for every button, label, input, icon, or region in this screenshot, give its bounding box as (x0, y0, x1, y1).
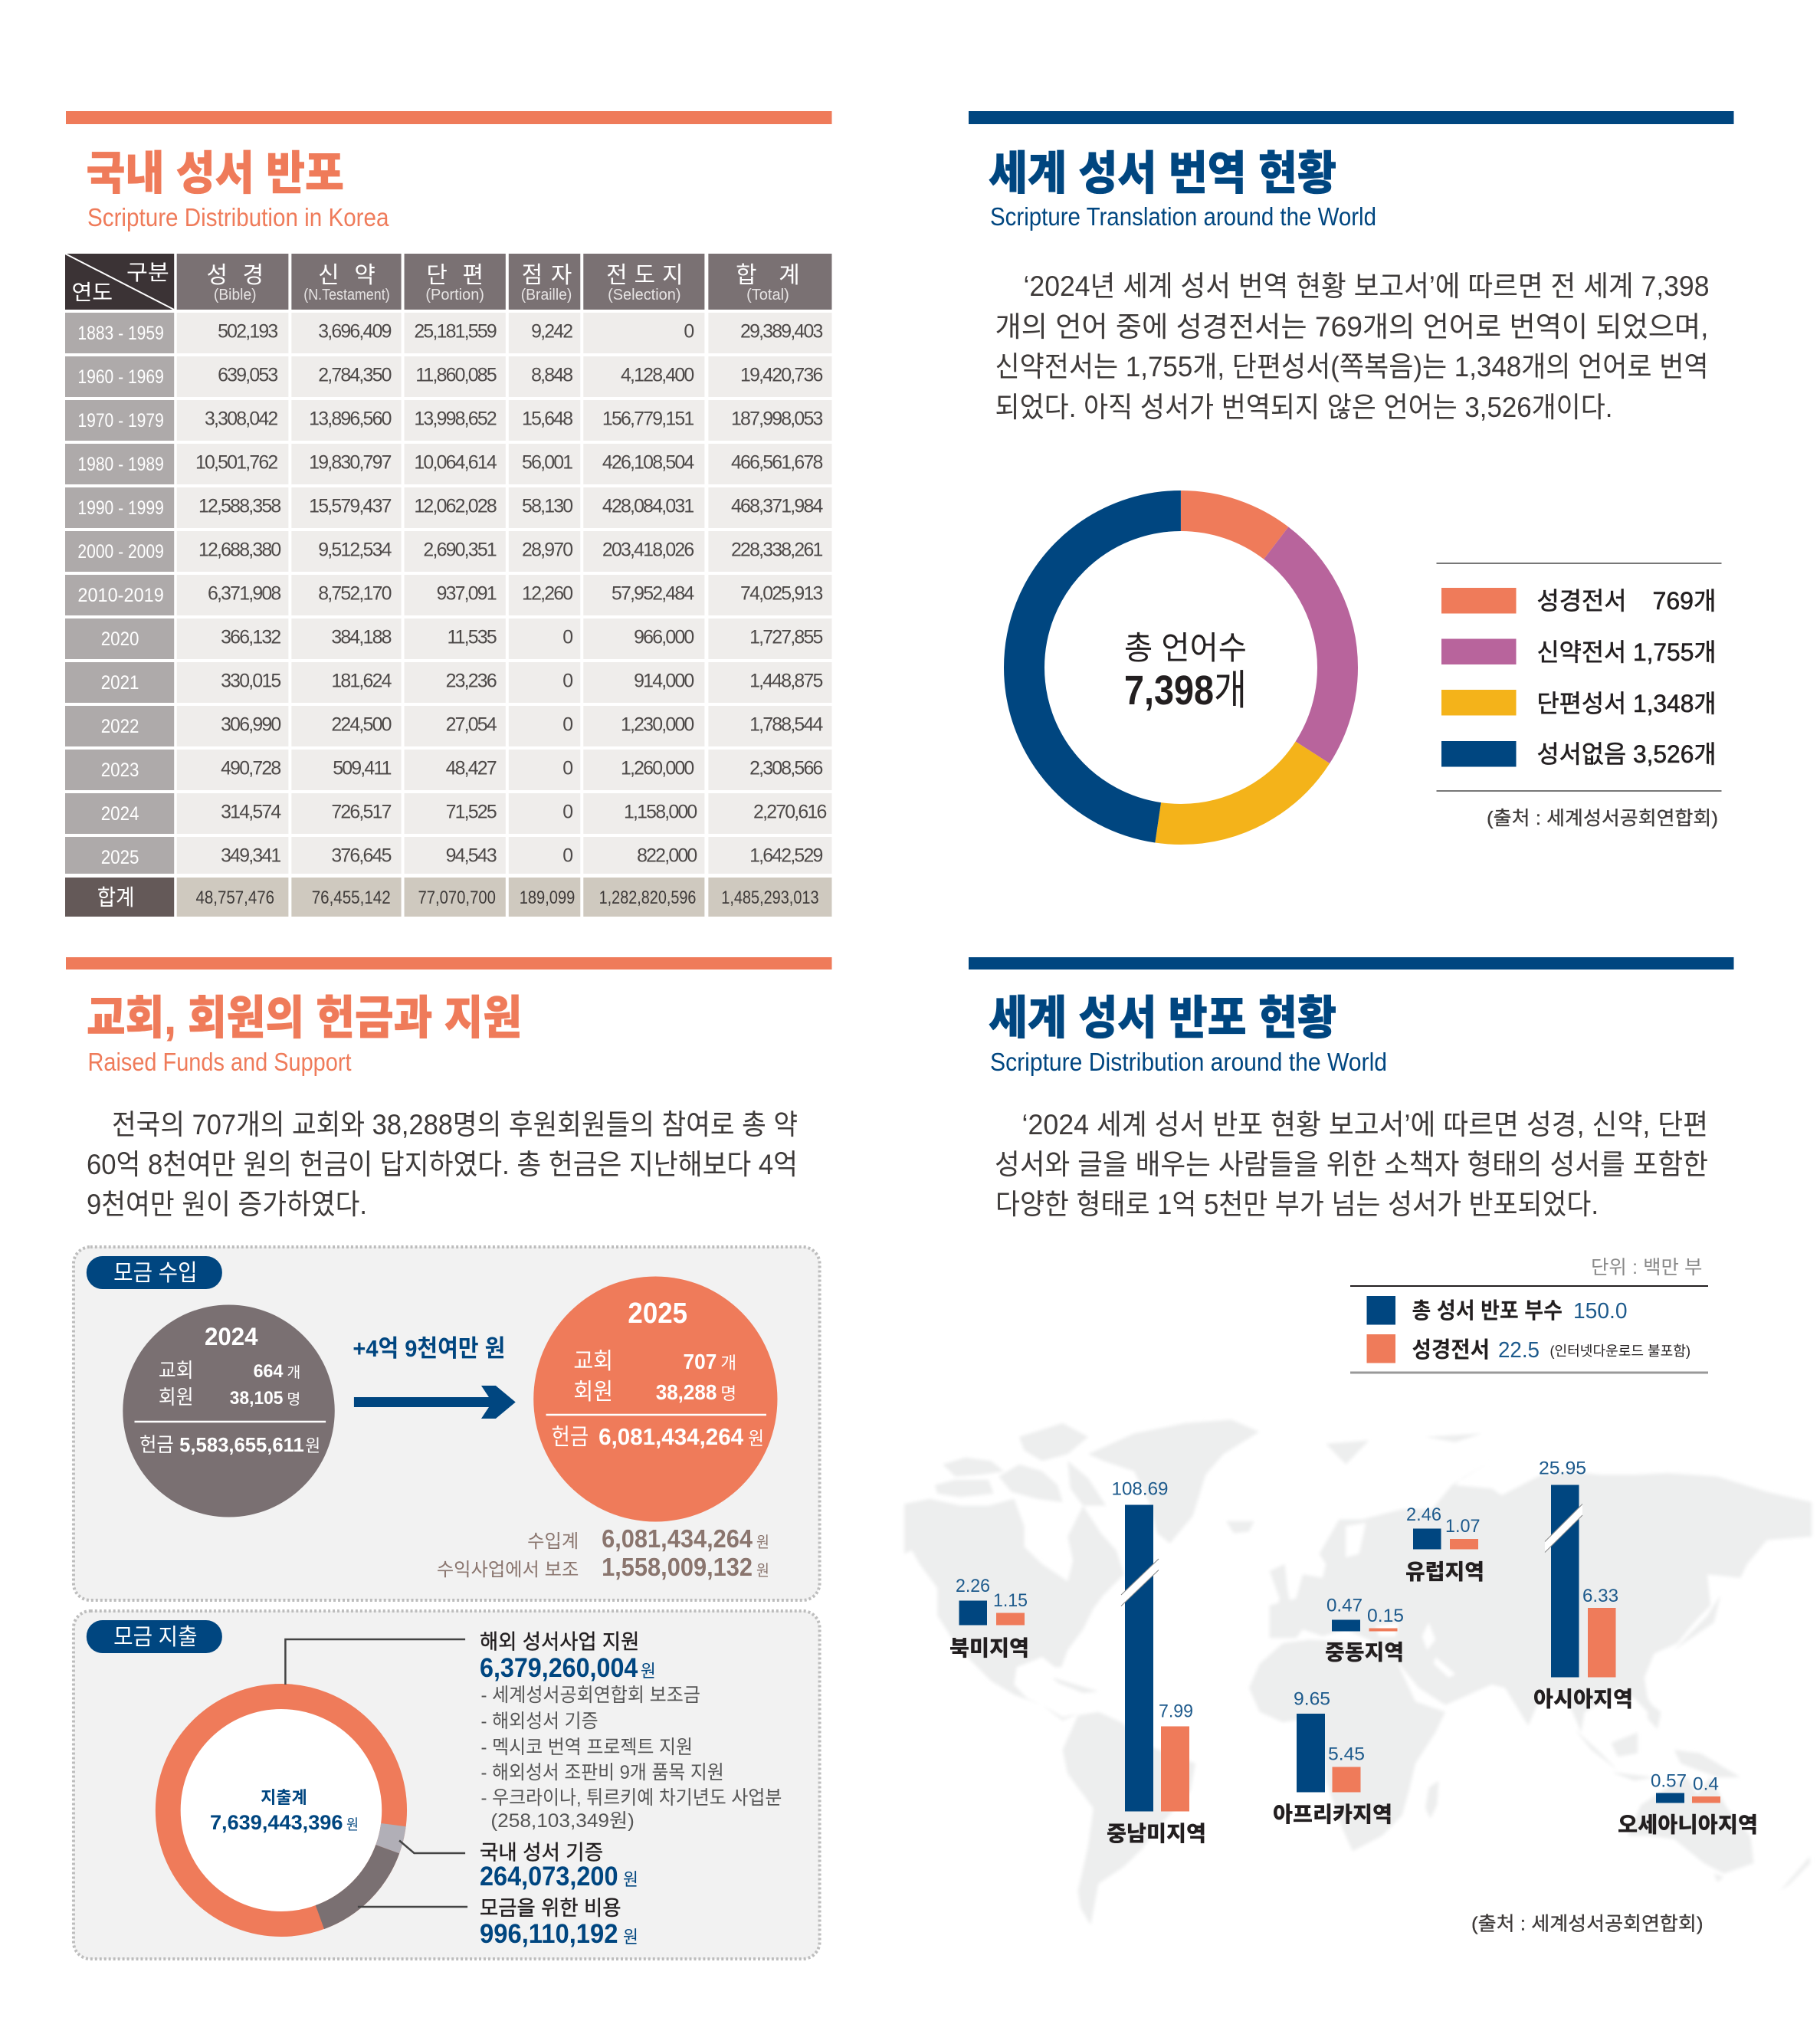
row 2021: 23,236 (446, 670, 497, 692)
row 1970-1979 (77, 408, 822, 431)
region: North America: 북미지역 (949, 1636, 1029, 1660)
donut chart: languages (1024, 510, 1338, 825)
row 1990-1999: 12,588,358 (198, 495, 280, 517)
row 1960-1969: 1960 - 1969 (77, 366, 164, 388)
bar legend: (인터넷다운로드 불포함) (1549, 1344, 1690, 1359)
row 2010-2019: 12,260 (522, 582, 572, 605)
row 2024: 314,574 (221, 801, 281, 823)
bar legend (1350, 1286, 1708, 1373)
row 2000-2009: 2,690,351 (423, 539, 497, 561)
source note: (출처 : 세계성서공회연합회) (1487, 808, 1718, 829)
domestic donation (480, 1841, 638, 1891)
table row backgrounds (65, 313, 831, 874)
row 1970-1979: 1970 - 1979 (77, 410, 164, 431)
row 2020: 384,188 (331, 626, 392, 648)
circle: 2024: 664 (254, 1361, 284, 1382)
row 1980-1989: 56,001 (522, 451, 572, 474)
donut legend (1436, 563, 1721, 791)
domestic donation: 원 (623, 1869, 638, 1889)
row 2022: 1,230,000 (621, 714, 694, 736)
income totals (437, 1524, 769, 1581)
circle: 2025: 교회 (573, 1349, 613, 1374)
panel: fundraising income (74, 1247, 820, 1600)
circle: 2025: 6,081,434,264 (598, 1423, 744, 1450)
row 1980-1989: 1980 - 1989 (77, 454, 164, 475)
region: Africa (1273, 1689, 1392, 1826)
row 1980-1989: 466,561,678 (731, 451, 822, 474)
row 1970-1979: 13,896,560 (309, 408, 392, 430)
row 2010-2019: 57,952,484 (612, 582, 694, 605)
section bar (969, 111, 1733, 124)
row 1980-1989: 10,501,762 (195, 451, 277, 474)
row 2025: 1,642,529 (749, 845, 822, 867)
donut chart: languages: 7,398개 (1124, 668, 1247, 714)
row 1960-1969: 8,848 (531, 364, 572, 386)
table header: (Portion) (425, 287, 484, 303)
table header: 성 경 (206, 263, 264, 288)
circle: 2025: 개 (720, 1353, 736, 1373)
row 2020: 2020 (101, 628, 139, 650)
row 2000-2009: 228,338,261 (731, 539, 822, 561)
row 1960-1969: 2,784,350 (318, 364, 392, 386)
arrow (354, 1386, 516, 1419)
bar legend: 150.0 (1573, 1299, 1628, 1324)
overseas support details: 원 (641, 1661, 656, 1681)
panel: fundraising expenditure (74, 1611, 820, 1959)
row 1990-1999: 15,579,437 (309, 495, 392, 517)
table header (65, 254, 831, 310)
pill label (87, 1256, 222, 1289)
paragraph: 전국의 707개의 교회와 38,288명의 후원회원들의 참여로 총 약 (112, 1109, 798, 1140)
row 2025: 94,543 (446, 845, 497, 867)
panel: raised funds and support (66, 957, 832, 1959)
region: Oceania: 0.4 (1693, 1773, 1719, 1795)
row 2020: 366,132 (221, 626, 280, 648)
circle: 2024 (123, 1304, 335, 1517)
circle: 2024: 회원 (159, 1386, 194, 1409)
region: Asia (1533, 1458, 1633, 1711)
row 2021: 330,015 (221, 670, 280, 692)
row 2021 (101, 670, 822, 694)
row 1990-1999: 1990 - 1999 (77, 497, 164, 519)
paragraph: 9천여만 원이 증가하였다. (87, 1189, 367, 1220)
region: Europe: 1.07 (1445, 1516, 1481, 1537)
row 1883-1959: 25,181,559 (414, 320, 497, 343)
row 2023: 2,308,566 (749, 757, 822, 779)
circle: 2024: 원 (305, 1436, 320, 1455)
paragraph: 60억 8천여만 원의 헌금이 답지하였다. 총 헌금은 지난해보다 4억 (87, 1149, 798, 1180)
circle: 2025: 38,288 (656, 1380, 717, 1404)
row 2010-2019: 6,371,908 (208, 582, 280, 605)
row 1980-1989: 19,830,797 (309, 451, 392, 474)
paragraph: 신약전서는 1,755개, 단편성서(쪽복음)는 1,348개의 언어로 번역 (995, 351, 1709, 382)
table header: 전 도 지 (606, 263, 684, 288)
row 2022: 224,500 (331, 714, 392, 736)
bar legend: 성경전서 (1412, 1337, 1490, 1363)
circle: 2025: 명 (720, 1384, 736, 1403)
overseas support details: - 세계성서공회연합회 보조금 (480, 1685, 700, 1706)
donut legend: 성서없음 3,526개 (1537, 740, 1717, 768)
row 2000-2009: 203,418,026 (602, 539, 694, 561)
row 2010-2019: 937,091 (437, 582, 497, 605)
fundraising cost: 모금을 위한 비용 (480, 1897, 621, 1920)
region: Oceania (1618, 1770, 1758, 1836)
table header: (Braille) (521, 287, 572, 303)
row 2023: 48,427 (446, 757, 497, 779)
row 2021: 1,448,875 (749, 670, 822, 692)
row 2021: 0 (562, 670, 572, 692)
total row: 48,757,476 (196, 887, 274, 908)
circle: 2025: 2025 (628, 1298, 687, 1330)
income totals: 6,081,434,264 (602, 1524, 753, 1553)
subheading: Raised Funds and Support (87, 1048, 351, 1076)
table header: 점 자 (522, 263, 572, 288)
panel: scripture translation around the world (969, 111, 1733, 829)
paragraph: ‘2024 세계 성서 반포 현황 보고서’에 따르면 성경, 신약, 단편 (1022, 1109, 1708, 1140)
region: Europe (1405, 1504, 1484, 1583)
paragraph: 성서와 글을 배우는 사람들을 위한 소책자 형태의 성서를 포함한 (995, 1149, 1708, 1180)
region: Europe: 2.46 (1406, 1504, 1441, 1525)
row 1970-1979: 187,998,053 (731, 408, 822, 430)
row 2024 (101, 801, 826, 825)
heading: 교회, 회원의 헌금과 지원 (87, 992, 522, 1044)
region: Africa: 5.45 (1328, 1744, 1365, 1764)
region: Oceania: 오세아니아지역 (1618, 1813, 1758, 1836)
table header: (N.Testament) (303, 287, 390, 303)
donut legend: 신약전서 1,755개 (1537, 638, 1717, 666)
row 2022: 27,054 (446, 714, 497, 736)
donut legend: 성경전서 (1537, 587, 1626, 615)
row 1990-1999: 12,062,028 (414, 495, 497, 517)
unit note: 단위 : 백만 부 (1591, 1257, 1703, 1278)
region: Middle East: 0.47 (1326, 1596, 1363, 1616)
fundraising cost (480, 1897, 638, 1949)
row 1960-1969 (77, 364, 822, 388)
region: Middle East: 중동지역 (1325, 1640, 1404, 1665)
circle: 2024: 5,583,655,611 (179, 1435, 304, 1456)
circle: 2024: 38,105 (230, 1388, 283, 1409)
total row (65, 878, 831, 917)
paragraph: 개의 언어 중에 성경전서는 769개의 언어로 번역이 되었으며, (995, 311, 1709, 343)
region: Africa: 아프리카지역 (1273, 1803, 1392, 1826)
panel: scripture distribution around the world (904, 957, 1812, 1934)
donut chart: expenditure (168, 1697, 395, 1924)
total row: 1,282,820,596 (599, 887, 696, 908)
pill label: 모금 지출 (113, 1625, 198, 1650)
row 2025: 349,341 (221, 845, 280, 867)
overseas support details: (258,103,349원) (490, 1810, 635, 1832)
region: Asia: 25.95 (1539, 1458, 1586, 1479)
circle: 2024: 2024 (205, 1323, 258, 1350)
table header: 연도 (71, 281, 113, 304)
section bar (66, 957, 832, 969)
row 2000-2009: 12,688,380 (198, 539, 280, 561)
circle: 2024: 헌금 (139, 1435, 174, 1456)
circle: 2024: 개 (287, 1364, 300, 1381)
circle: 2025: 원 (748, 1429, 764, 1449)
row 1883-1959: 502,193 (218, 320, 277, 343)
row 1883-1959: 1883 - 1959 (77, 323, 164, 344)
paragraph (87, 1109, 798, 1220)
paragraph: 다양한 형태로 1억 5천만 부가 넘는 성서가 반포되었다. (995, 1189, 1599, 1220)
region: Asia: 아시아지역 (1533, 1688, 1633, 1711)
row 1883-1959: 3,696,409 (318, 320, 392, 343)
overseas support details: 6,379,260,004 (480, 1653, 638, 1683)
row 1970-1979: 156,779,151 (602, 408, 694, 430)
donut chart: expenditure: 7,639,443,396 (210, 1811, 343, 1834)
donut legend: 단편성서 1,348개 (1537, 690, 1717, 717)
donut legend: 769개 (1652, 587, 1717, 615)
subheading: Scripture Translation around the World (990, 202, 1376, 231)
total row: 189,099 (520, 887, 575, 908)
total row: 1,485,293,013 (721, 887, 819, 908)
row 2025: 2025 (101, 847, 139, 868)
row 2024: 726,517 (331, 801, 392, 823)
domestic donation: 264,073,200 (480, 1862, 618, 1891)
row 1970-1979: 13,998,652 (414, 408, 497, 430)
row 2023 (101, 757, 822, 781)
circle: 2024: 교회 (159, 1360, 194, 1382)
row 2023: 509,411 (333, 757, 392, 779)
region: Central and South America (1107, 1479, 1206, 1845)
heading: 국내 성서 반포 (86, 148, 344, 199)
row 2020: 1,727,855 (749, 626, 822, 648)
region: North America: 2.26 (956, 1576, 990, 1596)
row 2022: 2022 (101, 716, 139, 737)
domestic donation: 국내 성서 기증 (480, 1841, 603, 1865)
row 1883-1959: 0 (684, 320, 694, 343)
income totals: 원 (756, 1534, 769, 1551)
row 1960-1969: 19,420,736 (740, 364, 822, 386)
region: Central and South America: 108.69 (1111, 1479, 1168, 1499)
row 2022 (101, 714, 823, 737)
row 2021: 2021 (101, 672, 139, 694)
source note: (출처 : 세계성서공회연합회) (1471, 1913, 1703, 1934)
region: Oceania: 0.57 (1651, 1770, 1687, 1792)
section bar (969, 957, 1733, 969)
row 2024: 2024 (101, 803, 139, 825)
table header: 구분 (126, 261, 169, 284)
overseas support details: - 멕시코 번역 프로젝트 지원 (480, 1737, 693, 1758)
row 1990-1999 (77, 495, 823, 519)
leader lines (285, 1639, 467, 1907)
region: Central and South America: 중남미지역 (1107, 1822, 1206, 1845)
paragraph (995, 271, 1709, 423)
total row: 77,070,700 (418, 887, 496, 908)
row 1970-1979: 15,648 (522, 408, 572, 430)
paragraph: ‘2024년 세계 성서 번역 현황 보고서’에 따르면 전 세계 7,398 (1024, 271, 1709, 302)
region: Asia: 6.33 (1582, 1586, 1618, 1606)
row 2010-2019 (77, 582, 822, 606)
row 1883-1959 (77, 320, 822, 344)
income totals: 원 (756, 1562, 769, 1580)
donut chart: expenditure: 지출계 (261, 1788, 307, 1807)
row 1980-1989: 426,108,504 (602, 451, 694, 474)
fundraising cost: 996,110,192 (480, 1919, 618, 1949)
row 2000-2009: 2000 - 2009 (77, 541, 164, 563)
row 2025: 0 (562, 845, 572, 867)
row 1990-1999: 468,371,984 (731, 495, 823, 517)
row 2010-2019: 74,025,913 (740, 582, 822, 605)
row 2024: 0 (562, 801, 572, 823)
pill label (87, 1620, 222, 1653)
bar legend: 22.5 (1498, 1338, 1540, 1363)
table header: (Selection) (608, 287, 681, 303)
circle: 2024: 명 (287, 1391, 300, 1408)
row 2021: 914,000 (634, 670, 694, 692)
row 2024: 2,270,616 (753, 801, 826, 823)
circle: 2025: 헌금 (551, 1425, 589, 1450)
circle: 2025: 회원 (573, 1380, 613, 1405)
row 1980-1989 (77, 451, 822, 475)
paragraph: 되었다. 아직 성서가 번역되지 않은 언어는 3,526개이다. (995, 392, 1612, 423)
total row: 합계 (97, 886, 134, 910)
row 2023: 0 (562, 757, 572, 779)
row 1960-1969: 4,128,400 (621, 364, 694, 386)
panel: scripture distribution in Korea (65, 111, 832, 917)
pill label: 모금 수입 (113, 1261, 198, 1286)
row 2022: 1,788,544 (749, 714, 823, 736)
world map (904, 1419, 1812, 1925)
paragraph (995, 1109, 1708, 1220)
table header: 단 편 (426, 263, 484, 288)
region: Middle East (1325, 1596, 1404, 1665)
donut chart: languages: 총 언어수 (1124, 630, 1247, 666)
row 2020: 11,535 (447, 626, 497, 648)
row 2000-2009 (77, 539, 822, 563)
row 2020 (101, 626, 822, 650)
heading: 세계 성서 반포 현황 (989, 992, 1336, 1044)
row 1970-1979: 3,308,042 (205, 408, 277, 430)
row 2025 (101, 845, 822, 868)
income totals: 수익사업에서 보조 (437, 1560, 579, 1580)
region: North America: 1.15 (993, 1590, 1028, 1611)
total row: 76,455,142 (312, 887, 391, 908)
section bar (66, 111, 832, 124)
row 1960-1969: 11,860,085 (415, 364, 497, 386)
row 1990-1999: 58,130 (522, 495, 572, 517)
region: Central and South America: 7.99 (1159, 1701, 1193, 1721)
subheading: Scripture Distribution in Korea (87, 203, 389, 231)
table header: 합 계 (736, 263, 800, 288)
table header: 신 약 (318, 263, 375, 288)
row 1883-1959: 29,389,403 (740, 320, 822, 343)
row 1960-1969: 639,053 (218, 364, 277, 386)
fundraising cost: 원 (623, 1927, 638, 1947)
bar legend: 총 성서 반포 부수 (1412, 1298, 1563, 1324)
heading: 세계 성서 번역 현황 (989, 148, 1336, 199)
overseas support details: 해외 성서사업 지원 (480, 1630, 639, 1654)
row 2000-2009: 9,512,534 (318, 539, 392, 561)
row 2024: 1,158,000 (624, 801, 697, 823)
table header: (Total) (746, 287, 789, 303)
row 2024: 71,525 (446, 801, 497, 823)
increase label: +4억 9천여만 원 (353, 1335, 505, 1362)
income totals: 1,558,009,132 (602, 1553, 753, 1581)
income totals: 수입계 (527, 1531, 579, 1552)
row 2023: 490,728 (221, 757, 280, 779)
circle: 2025: 707 (684, 1350, 717, 1373)
donut chart: expenditure: 원 (346, 1816, 359, 1833)
region: North America (949, 1576, 1029, 1660)
row 1883-1959: 9,242 (531, 320, 572, 343)
row 2010-2019: 8,752,170 (318, 582, 392, 605)
region: Middle East: 0.15 (1367, 1606, 1404, 1626)
table header: (Bible) (214, 287, 257, 303)
row 2023: 2023 (101, 760, 139, 781)
row 2000-2009: 28,970 (522, 539, 572, 561)
subheading: Scripture Distribution around the World (990, 1048, 1387, 1076)
overseas support details: - 해외성서 조판비 9개 품목 지원 (480, 1762, 724, 1783)
region: Africa: 9.65 (1294, 1689, 1330, 1709)
row 2020: 0 (562, 626, 572, 648)
overseas support details (480, 1630, 782, 1832)
row 1980-1989: 10,064,614 (414, 451, 497, 474)
table: distribution by period (65, 254, 831, 917)
region: Europe: 유럽지역 (1405, 1560, 1484, 1583)
row 2025: 822,000 (637, 845, 697, 867)
row 2021: 181,624 (331, 670, 392, 692)
row 2022: 0 (562, 714, 572, 736)
circle: 2025 (533, 1277, 777, 1522)
overseas support details: - 해외성서 기증 (480, 1711, 598, 1732)
row 2022: 306,990 (221, 714, 280, 736)
row 1990-1999: 428,084,031 (602, 495, 694, 517)
row 2020: 966,000 (634, 626, 694, 648)
row 2010-2019: 2010-2019 (77, 585, 164, 606)
row 2023: 1,260,000 (621, 757, 694, 779)
overseas support details: - 우크라이나, 튀르키예 차기년도 사업분 (480, 1787, 782, 1809)
row 2025: 376,645 (331, 845, 392, 867)
